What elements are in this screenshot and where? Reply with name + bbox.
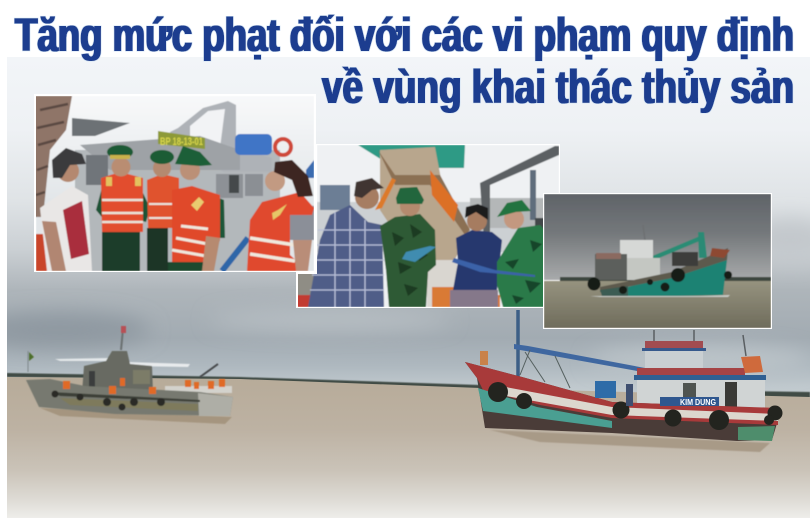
boat name: KIM DUNG xyxy=(680,398,716,407)
stern crew xyxy=(626,384,633,406)
sky xyxy=(544,194,771,280)
bow wave xyxy=(590,295,730,297)
bow figure xyxy=(480,351,488,365)
reflections under the boats xyxy=(40,408,232,424)
motorbikes xyxy=(534,218,543,230)
boat hull and teal roof xyxy=(358,145,465,168)
photo frame xyxy=(296,144,560,308)
roof on the right xyxy=(480,146,559,240)
left white margin xyxy=(0,57,7,518)
clouds xyxy=(0,220,810,374)
net and orange crates xyxy=(427,260,457,307)
canopies xyxy=(55,358,110,361)
photo 1: officers on patrol boat xyxy=(34,94,316,272)
crew in orange vests xyxy=(63,378,225,394)
window panels xyxy=(216,174,243,198)
man in white T-shirt xyxy=(40,148,92,271)
hull xyxy=(628,260,727,297)
orange stern box xyxy=(741,356,763,373)
tyres xyxy=(488,382,782,430)
soldier 1 xyxy=(96,145,150,271)
sky xyxy=(317,145,559,307)
title xyxy=(15,8,794,113)
blue tank xyxy=(235,134,272,155)
sky xyxy=(7,57,810,400)
water xyxy=(544,281,771,328)
placard text: BP 18-13-01 xyxy=(160,136,203,148)
flag xyxy=(27,351,29,372)
shore water xyxy=(317,202,518,252)
cabin masts xyxy=(654,330,746,356)
soldier in camo with paper xyxy=(452,200,543,307)
tyres xyxy=(52,390,165,410)
mast and blue boom xyxy=(516,310,520,378)
rear deck grey xyxy=(75,150,280,271)
superstructure xyxy=(170,100,237,148)
mast xyxy=(121,329,123,350)
gun pipe xyxy=(200,364,218,377)
fishing boat KIM DUNG xyxy=(465,310,782,441)
photo frame xyxy=(543,193,772,329)
man in navy shirt xyxy=(450,204,502,307)
sky xyxy=(36,96,314,271)
man in plaid shirt xyxy=(308,178,384,307)
hull xyxy=(465,362,778,441)
tree line on the horizon xyxy=(7,373,810,398)
water xyxy=(7,377,810,518)
soldier 2 xyxy=(147,150,179,271)
white rail xyxy=(165,386,232,393)
red barrel lower left xyxy=(36,234,49,271)
woman in life vest xyxy=(247,160,314,271)
mast xyxy=(644,232,646,240)
distant boats xyxy=(320,185,350,210)
boom xyxy=(652,236,699,258)
corner scrap of background photo xyxy=(298,274,314,296)
wheelhouse xyxy=(82,351,153,393)
soldier 3 xyxy=(168,146,225,271)
grey patrol boat xyxy=(26,326,233,416)
soldier in camo xyxy=(380,187,436,307)
rope xyxy=(35,96,72,217)
photo 3: fishing boat at sea xyxy=(543,193,772,329)
cabin xyxy=(620,240,653,258)
green hull placard xyxy=(158,131,205,149)
photo frame xyxy=(34,94,316,272)
far shore xyxy=(560,277,771,281)
crew xyxy=(672,252,698,266)
hull xyxy=(26,379,233,416)
photo 2: border guards checking papers with fishermen xyxy=(296,144,560,308)
upper cabin xyxy=(645,342,703,369)
blue pipe xyxy=(222,238,248,271)
KIM DUNG banner xyxy=(660,397,719,406)
tyres xyxy=(588,268,732,294)
lifebuoy xyxy=(275,139,291,155)
main cabin xyxy=(637,377,765,409)
blue barrel xyxy=(595,381,616,398)
